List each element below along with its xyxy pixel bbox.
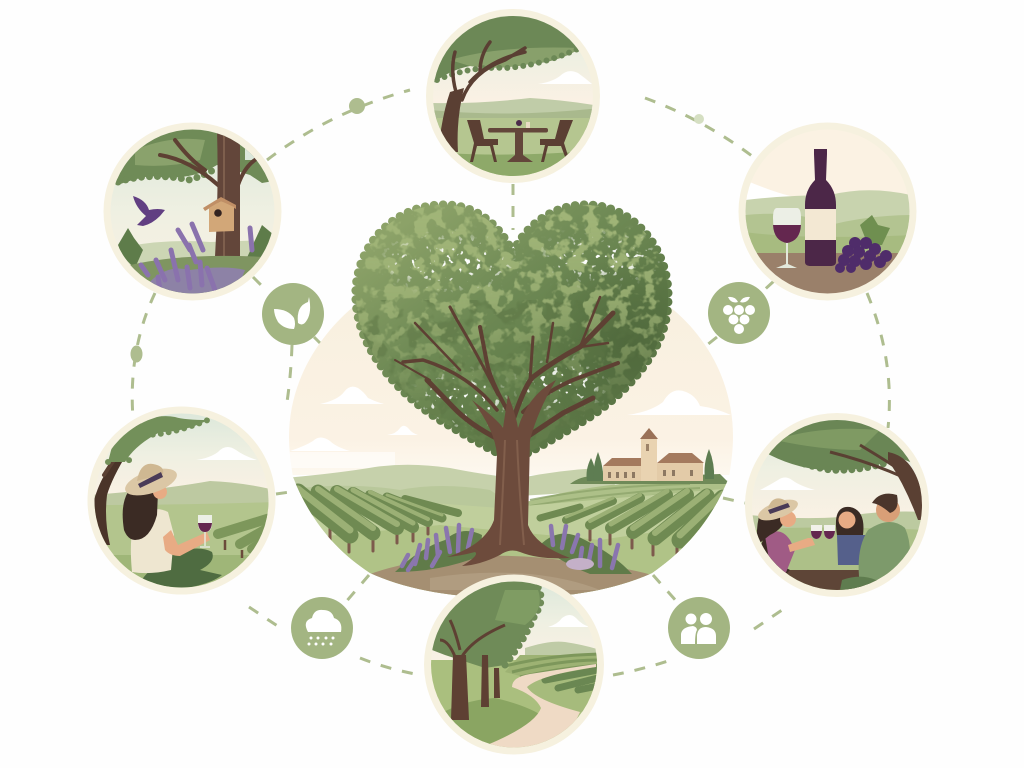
ground xyxy=(302,489,724,596)
scene: bottom, winding path through trees xyxy=(424,574,605,754)
villa xyxy=(570,428,730,484)
icon: grapes xyxy=(708,282,770,344)
vineyard rows left xyxy=(298,489,458,552)
icon: people xyxy=(668,597,730,659)
trunk xyxy=(447,380,570,566)
canopy foliage xyxy=(356,204,668,450)
scene: right, friends toasting xyxy=(745,410,930,600)
vineyard rows right xyxy=(540,491,723,558)
heart tree xyxy=(340,195,685,566)
branches xyxy=(395,297,618,440)
scene: left, woman with wine xyxy=(88,406,276,600)
hills xyxy=(293,464,615,501)
lavender right xyxy=(540,526,632,574)
clouds xyxy=(285,387,731,468)
central landscape panel xyxy=(285,290,740,600)
scene: top-left, birdhouse and lavender xyxy=(104,122,282,300)
sky xyxy=(289,307,733,475)
canopy scalloped edge xyxy=(356,205,668,460)
infographic: heart tree vineyard cycle xyxy=(88,9,929,754)
lavender left xyxy=(395,525,482,572)
icon: leaf xyxy=(262,283,324,345)
dashed connector ring xyxy=(130,90,889,675)
right field xyxy=(528,480,728,594)
scene: top, table under tree xyxy=(426,9,600,183)
icon: rain cloud xyxy=(291,597,353,659)
scene: top-right, wine bottle and grapes xyxy=(738,122,916,300)
soil xyxy=(371,556,650,596)
